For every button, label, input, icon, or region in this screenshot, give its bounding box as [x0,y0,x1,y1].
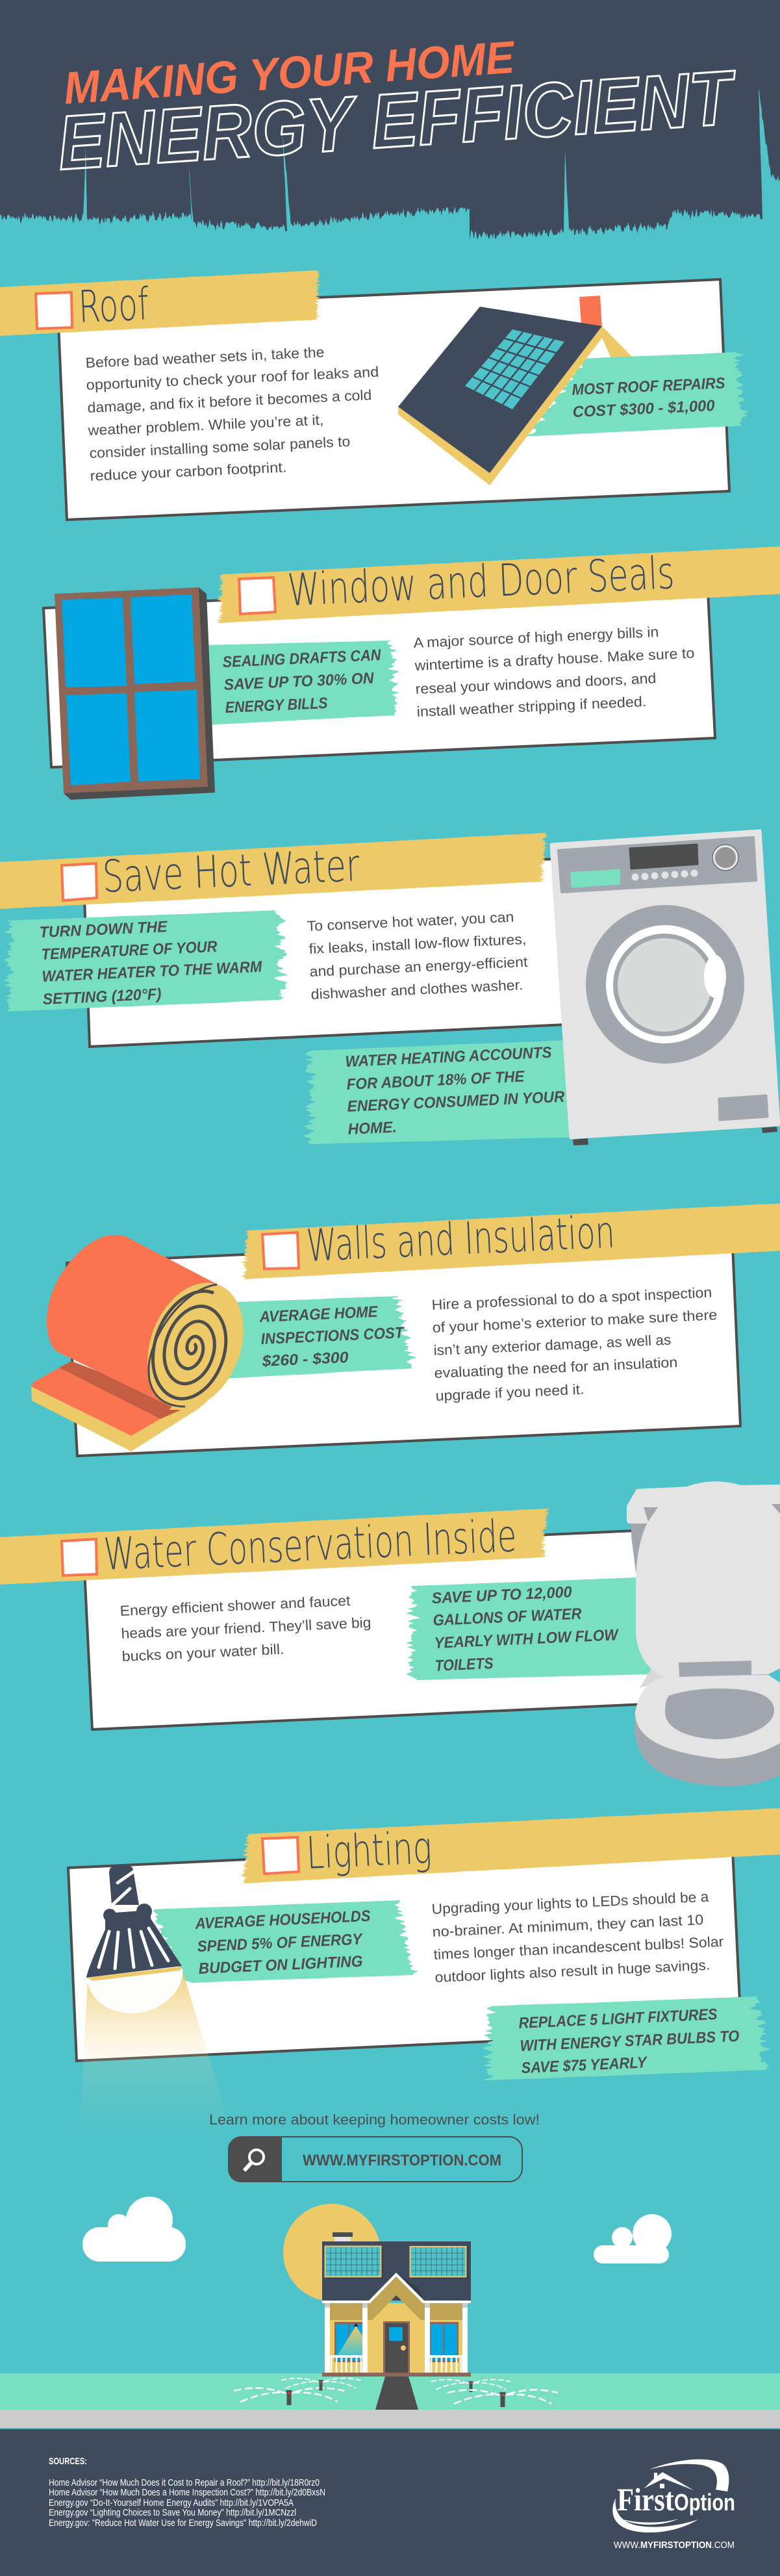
hot water callout 1 text [39,918,263,1008]
sources list: Energy.gov “Lighting Choices to Save You Money” http://bit.ly/1MCNzzl [49,2507,296,2518]
hot water callout 1 text: WATER HEATER TO THE WARM [42,958,263,986]
lighting checkbox [262,1837,299,1874]
panel: lighting [68,1807,780,2134]
walls body text: isn’t any exterior damage, as well as [433,1331,672,1358]
hot water callout 2 text: FOR ABOUT 18% OF THE [346,1068,525,1093]
icon: sprinkler right back [431,2380,510,2392]
panel: window and door seals [44,546,780,800]
icon: sun [283,2204,381,2301]
seals body text: A major source of high energy bills in [413,624,659,651]
water body text: heads are your friend. They’ll save big [121,1614,371,1642]
panel: save hot water [0,831,779,1145]
hot water callout 1 text: TEMPERATURE OF YOUR [41,938,218,963]
icon: washing machine [551,831,779,1145]
water callout text: SAVE UP TO 12,000 [431,1583,573,1607]
lighting heading: Lighting [305,1822,433,1880]
walls banner [244,1203,780,1279]
hot water callout 1 background [9,910,282,1012]
website url: WWW.MYFIRSTOPTION.COM [303,2152,501,2169]
walls body text: of your home’s exterior to make sure there [432,1307,718,1336]
hot water body text [307,909,528,1002]
seals callout text: ENERGY BILLS [225,695,328,717]
icon: window [55,587,215,800]
hot water callout 2 text [345,1044,566,1138]
walls callout text [258,1303,405,1370]
lighting callout 2 text: WITH ENERGY STAR BULBS TO [520,2028,740,2055]
roof body text: weather problem. While you’re at it, [87,412,324,439]
water callout text: YEARLY WITH LOW FLOW [434,1626,620,1652]
roof body text: reduce your carbon footprint. [90,459,287,484]
panel: roof [0,270,744,520]
hot water body text: and purchase an energy-efficient [309,954,528,980]
water heading: Water Conservation Inside [103,1511,518,1581]
roof callout text: MOST ROOF REPAIRS [572,374,725,399]
water callout text: GALLONS OF WATER [433,1605,583,1629]
hot water callout 1 text: TURN DOWN THE [39,918,168,941]
walls callout text: AVERAGE HOME [258,1303,379,1326]
walls callout text: $260 - $300 [261,1349,349,1370]
seals card [44,579,715,767]
roof body text [85,344,379,484]
walls body text: Hire a professional to do a spot inspection [431,1284,712,1313]
logo: first option: First [617,2481,674,2518]
water banner [0,1509,547,1585]
lighting body text: no-brainer. At minimum, they can last 10 [432,1911,704,1940]
seals body text [413,624,695,720]
lighting callout 1 text: SPEND 5% OF ENERGY [197,1930,364,1956]
sources list: Energy.gov “Do-It-Yourself Home Energy Audits” http://bit.ly/1VOPA5A [49,2497,294,2508]
lighting body text: outdoor lights also result in huge savings. [434,1957,711,1985]
hot water callout 2 text: ENERGY CONSUMED IN YOUR [347,1088,566,1116]
icon: toilet [627,1481,780,1786]
lighting callout 2 text [518,2006,740,2077]
logo: first option [612,2459,735,2532]
road [0,2410,780,2428]
header band [0,0,780,236]
lighting body text: Upgrading your lights to LEDs should be a [431,1889,710,1917]
panel: water conservation inside [0,1481,780,1786]
icon: roof gable [602,326,632,364]
hot water body text: fix leaks, install low-flow fixtures, [308,931,527,957]
walls checkbox [262,1232,299,1269]
icon: chimney [579,296,602,328]
hot water callout 1 text: SETTING (120°F) [42,986,162,1008]
roof callout text [572,374,725,421]
walls body text: evaluating the need for an insulation [434,1354,678,1381]
water card [84,1530,659,1729]
title: making your home: MAKING YOUR HOME [62,32,518,114]
roof card [58,279,729,520]
icon: light bulb with beam [79,1865,229,2134]
hot water body text: dishwasher and clothes washer. [310,976,523,1002]
water body text [120,1592,371,1664]
walls callout background [224,1296,413,1379]
lighting callout 2 text: SAVE $75 YEARLY [521,2054,648,2077]
lighting card [68,1837,741,2061]
walls card [67,1231,740,1456]
lighting callout 1 text [194,1907,371,1978]
footer [0,2429,780,2576]
lighting callout 1 text: AVERAGE HOUSEHOLDS [194,1907,371,1933]
water callout text [431,1583,620,1675]
roof checkbox [36,292,72,329]
hot water callout 2 background [308,1039,588,1144]
walls callout text: INSPECTIONS COST [260,1324,405,1348]
seals banner [219,546,780,623]
lighting body text [431,1889,724,1985]
hot water callout 2 text: HOME. [347,1119,397,1138]
sources heading: SOURCES: [49,2456,87,2467]
sources list: Home Advisor “How Much Does it Cost to Repair a Roof?” http://bit.ly/18R0rz0 [49,2477,320,2488]
lighting banner [244,1807,780,1883]
seals callout text: SEALING DRAFTS CAN [222,646,382,671]
hot water checkbox [62,863,97,900]
icon: house [322,2232,471,2410]
icon: roof with solar panel [398,307,602,485]
roof body text: opportunity to check your roof for leaks and [86,364,379,393]
water callout text: TOILETS [434,1655,494,1675]
panel: walls and insulation [31,1203,780,1456]
roof heading: Roof [77,279,150,333]
sources list [49,2477,325,2529]
water callout background [410,1576,675,1680]
seals body text: install weather stripping if needed. [416,693,647,720]
icon: insulation roll [31,1235,260,1451]
hot water card [84,858,594,1047]
icon: sprinkler right front [447,2390,558,2407]
seals body text: reseal your windows and doors, and [415,670,657,697]
icon: magnifier [244,2150,264,2171]
title: energy efficient: ENERGY EFFICIENT [55,55,740,186]
seals callout background [201,641,395,725]
hot water heading: Save Hot Water [101,840,360,903]
icon: sprinkler left back [281,2378,360,2391]
walls body text: upgrade if you need it. [435,1381,585,1404]
roof callout text: COST $300 - $1,000 [572,397,716,421]
lighting body text: times longer than incandescent bulbs! Solar [433,1933,724,1963]
lighting callout 1 text: BUDGET ON LIGHTING [198,1953,363,1978]
roof banner [0,270,318,337]
seals checkbox [239,578,275,614]
icon: right cloud [594,2214,672,2264]
call to action text: Learn more about keeping homeowner costs low! [209,2111,540,2128]
seals callout text: SAVE UP TO 30% ON [223,670,375,694]
sources list: Home Advisor “How Much Does a Home Inspection Cost?” http://bit.ly/2d0BxsN [49,2487,325,2498]
hot water callout 2 text: WATER HEATING ACCOUNTS [345,1044,552,1071]
icon: sprinkler left front [234,2388,344,2405]
sources list: Energy.gov: "Reduce Hot Water Use for Energy Savings" http://bit.ly/2dehwiD [49,2518,317,2529]
water body text: Energy efficient shower and faucet [120,1592,351,1619]
roof body text: damage, and fix it before it becomes a cold [87,387,372,416]
hot water banner [0,833,545,910]
seals callout text [222,646,382,717]
hot water body text: To conserve hot water, you can [307,909,514,934]
water checkbox [62,1539,97,1575]
lighting callout 2 text: REPLACE 5 LIGHT FIXTURES [518,2006,718,2032]
lighting callout 1 background [152,1900,413,1983]
icon: left cloud [82,2197,186,2262]
walls body text [431,1284,718,1404]
water body text: bucks on your water bill. [121,1641,284,1664]
lighting callout 2 background [488,1996,766,2080]
logo: first option: Option [674,2489,735,2516]
roof body text: Before bad weather sets in, take the [85,344,325,371]
walls heading: Walls and Insulation [305,1207,616,1272]
footer website: WWW.MYFIRSTOPTION.COM [614,2540,735,2551]
lawn [0,2373,780,2410]
roof callout background [527,352,744,437]
roof body text: consider installing some solar panels to [89,433,351,461]
website search button [228,2137,522,2182]
seals body text: wintertime is a drafty house. Make sure to [414,644,695,674]
